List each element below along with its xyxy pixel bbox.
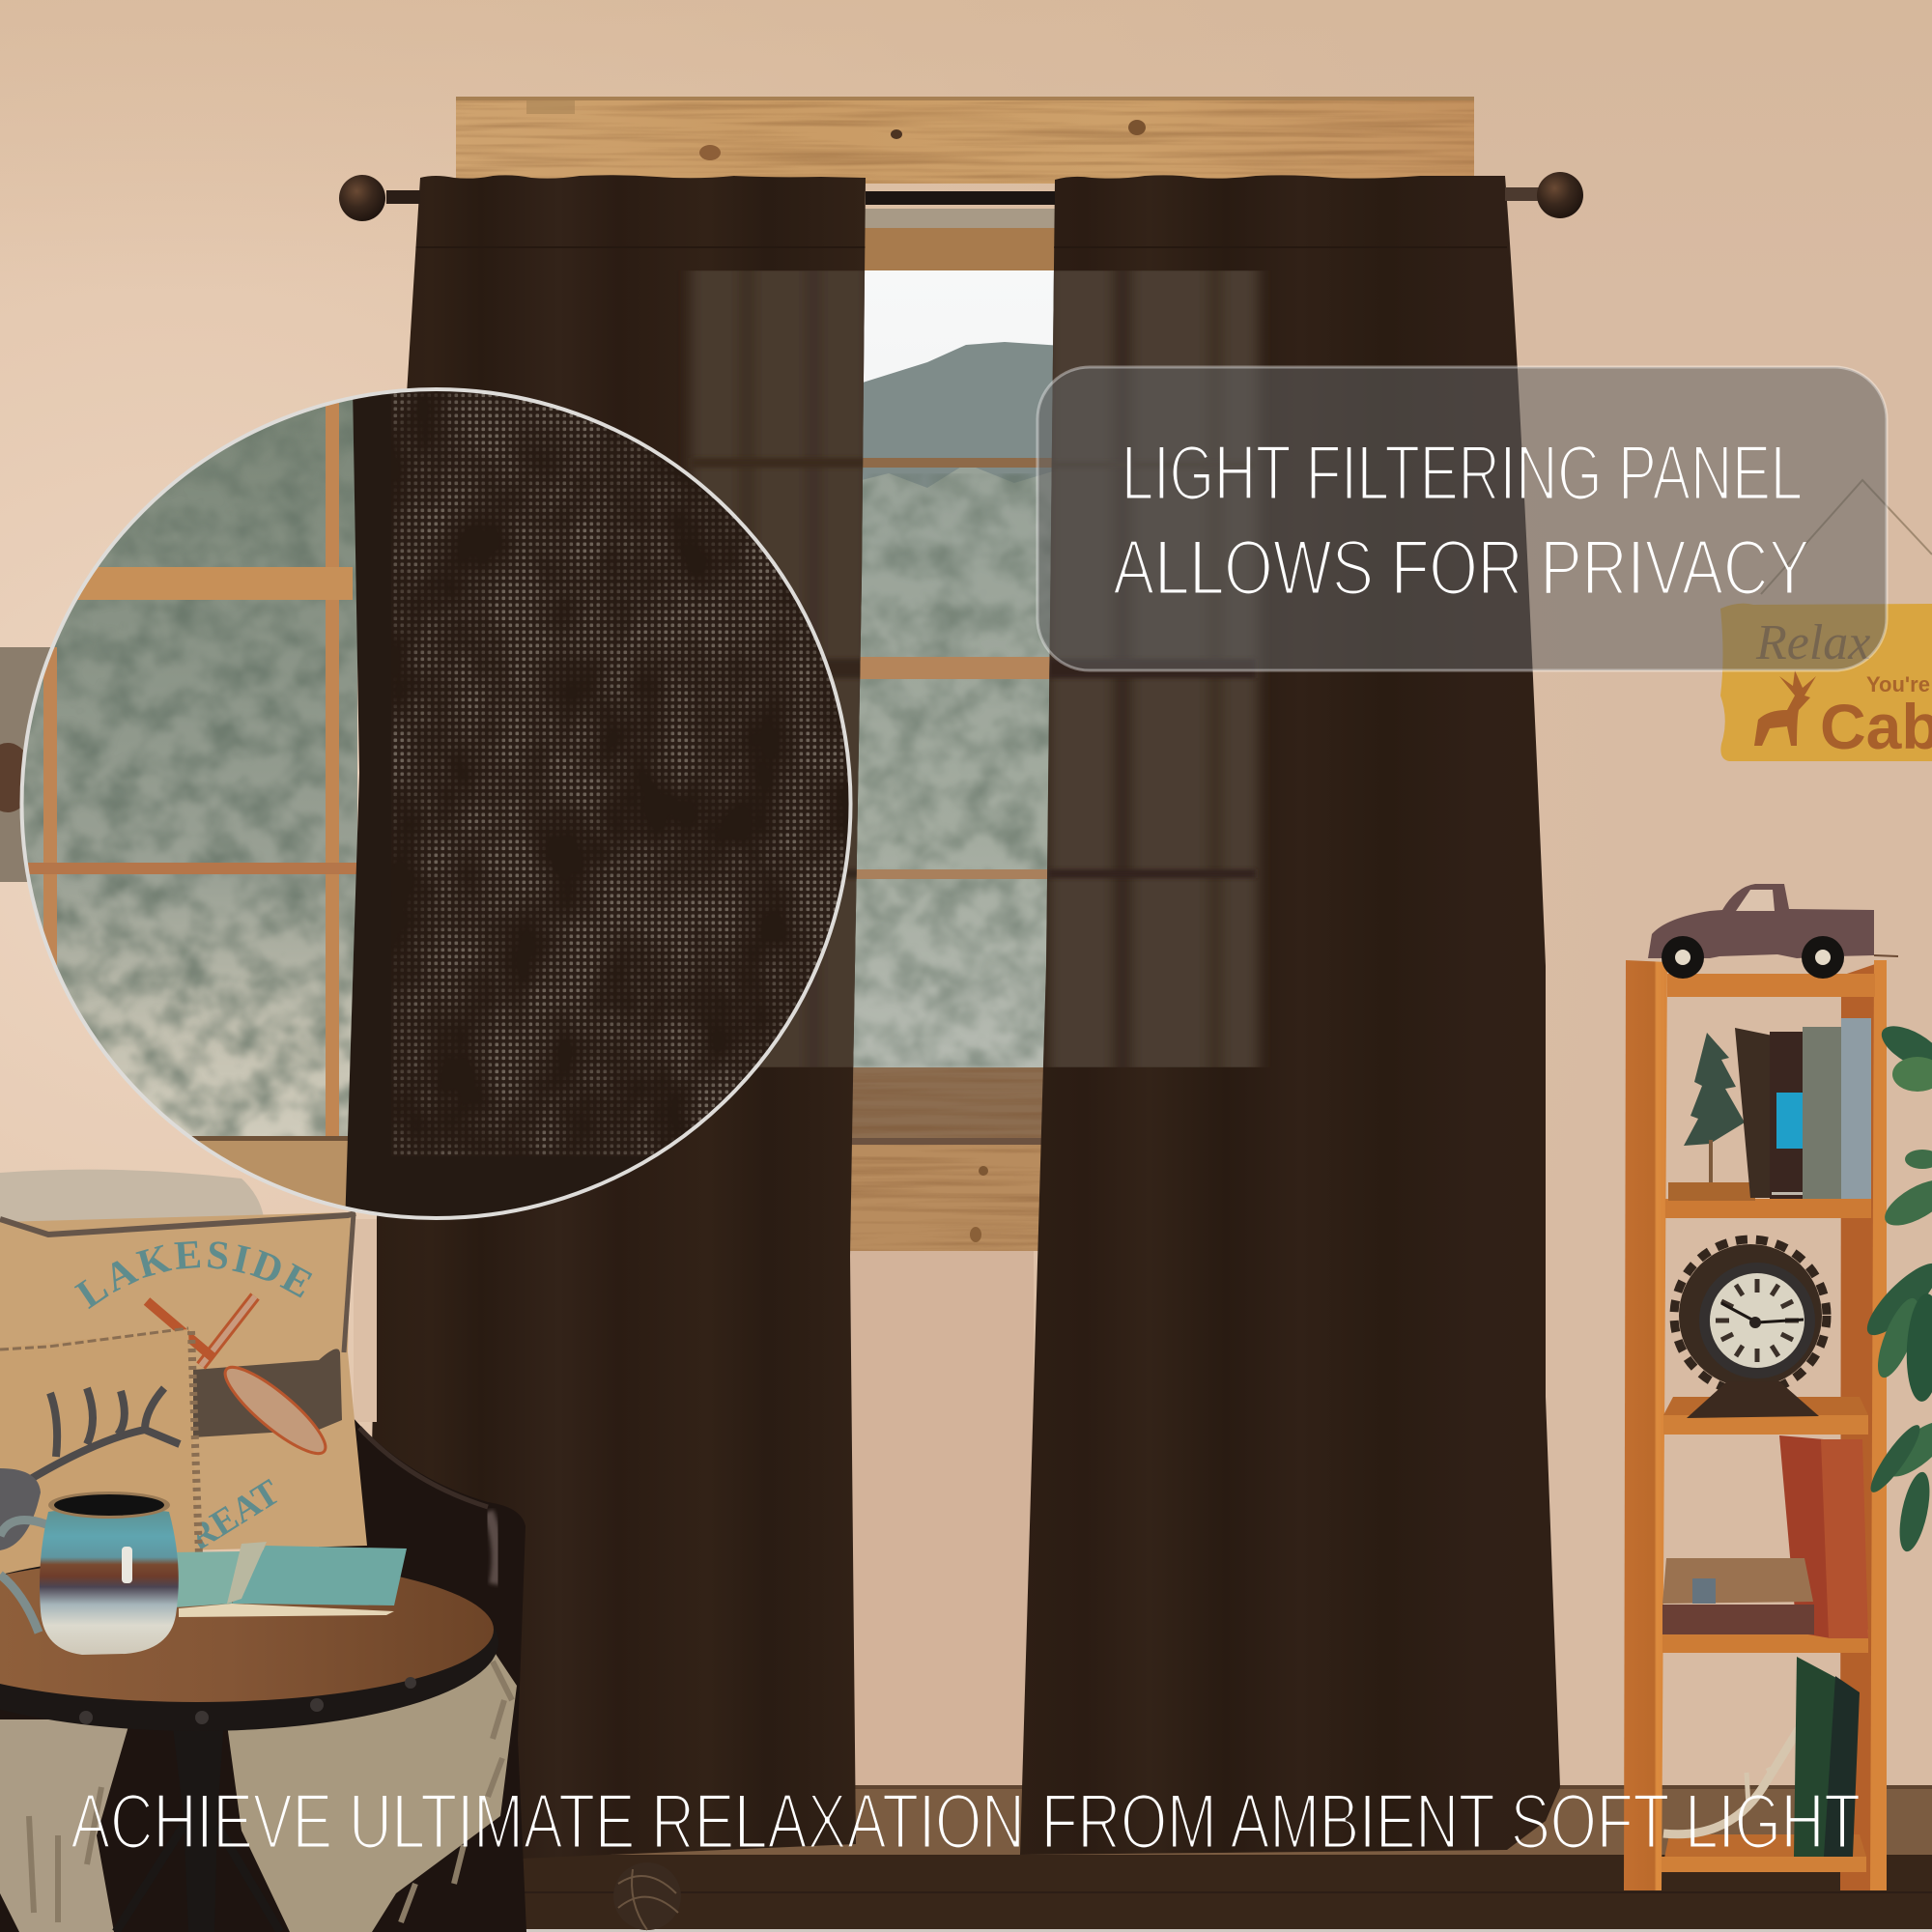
knit throw blanket — [0, 1170, 517, 1932]
lakeside pillow: REAT — [182, 1472, 287, 1559]
gear clock — [1674, 1239, 1827, 1418]
sheer window glow through left curtain — [691, 270, 869, 1067]
baseboard and wood floor — [0, 1785, 1932, 1932]
icon: wooden pine tree — [1668, 1033, 1755, 1201]
wood header board — [456, 97, 1474, 184]
callout panel: light filtering — [1037, 367, 1887, 670]
potted plant leaves — [1858, 1017, 1932, 1554]
right curtain panel — [1020, 175, 1560, 1855]
wicker ball on floor — [613, 1862, 681, 1930]
curtain rod with finials — [339, 172, 1583, 221]
magnified window scene — [19, 386, 357, 1225]
weathered wall hanging at left edge — [0, 647, 58, 882]
left curtain panel — [372, 175, 869, 1864]
stoneware mug — [0, 1492, 179, 1655]
crossed paddles — [147, 1296, 335, 1464]
lakeside pillow — [0, 1211, 367, 1559]
icon: deer on sign — [1754, 670, 1816, 746]
elk pillow — [0, 1328, 199, 1584]
elk antlers — [24, 1388, 180, 1483]
pillow lettering: LAKESIDE — [73, 1240, 313, 1309]
magnifier ring — [21, 389, 850, 1218]
sheer window glow through right curtain — [1048, 270, 1259, 1067]
magnifier circle: fabric detail — [19, 386, 869, 1227]
bookshelf — [1624, 960, 1887, 1890]
round wooden side table — [0, 1553, 498, 1932]
lower green books and antler — [1663, 1657, 1860, 1857]
hanging wooden sign — [1720, 480, 1932, 762]
truck wheels — [1662, 936, 1844, 979]
left finial — [339, 175, 385, 221]
hanging wooden sign: Relax — [1755, 615, 1870, 670]
open teal book — [172, 1542, 407, 1617]
right finial — [1537, 172, 1583, 218]
red and stacked books — [1662, 1435, 1868, 1638]
row of books — [1735, 1018, 1871, 1199]
leather chair — [0, 1219, 526, 1932]
toy wooden truck — [1648, 884, 1898, 979]
window view with mountain and forest — [850, 209, 1063, 1251]
magnified fabric weave — [345, 386, 869, 1227]
canoe silhouette — [193, 1349, 342, 1437]
